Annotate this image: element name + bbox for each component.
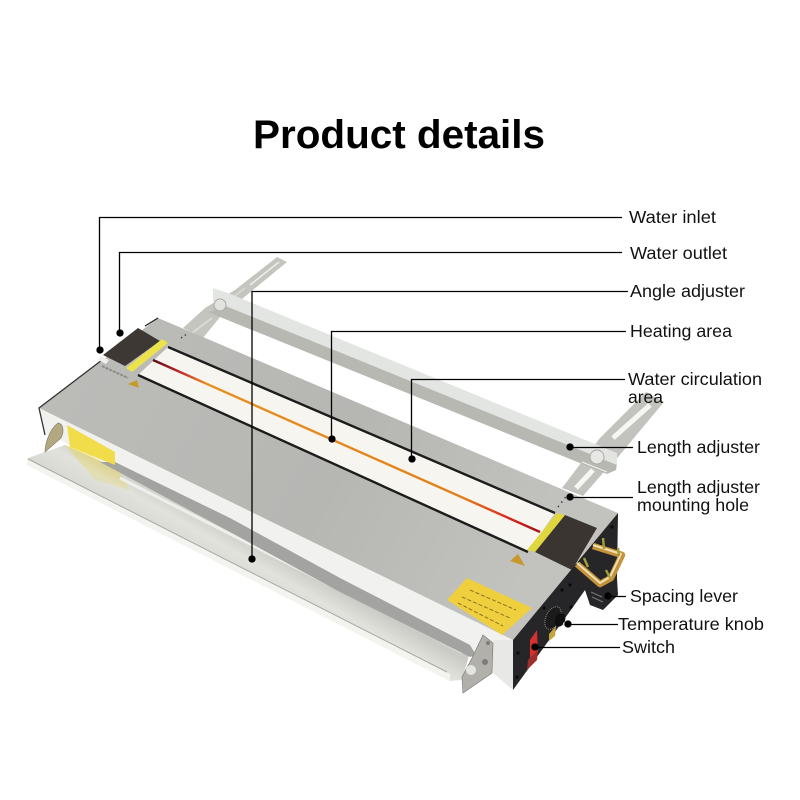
label: heating area: Heating area (630, 321, 732, 341)
spacing lever slots (591, 592, 603, 602)
label: water circulation area: Water circulation (628, 369, 762, 389)
right length adjuster arm (562, 392, 664, 496)
heating wire (153, 360, 540, 532)
label: spacing lever: Spacing lever (630, 586, 738, 606)
leader: length adjuster mounting hole (567, 494, 633, 500)
heating band (138, 347, 555, 552)
warning triangles (128, 380, 525, 566)
leader: temperature knob (565, 621, 618, 627)
yellow sticker on front face (67, 425, 115, 465)
left dark end cap with yellow band (98, 328, 168, 372)
label: temperature knob: Temperature knob (618, 614, 764, 634)
label: length adjuster mounting hole: mounting hole (637, 495, 749, 515)
leader: length adjuster (567, 444, 633, 450)
flap (lower aluminium lip) (27, 445, 470, 681)
yellow sticker on top (447, 578, 532, 635)
label: water outlet: Water outlet (630, 243, 727, 263)
leader: switch (532, 644, 620, 650)
red power switch (527, 630, 538, 670)
label: length adjuster: Length adjuster (637, 437, 760, 457)
label: water circulation area (628, 369, 762, 407)
temperature dial and knob (542, 604, 567, 641)
title: Product details (253, 113, 545, 157)
label: angle adjuster: Angle adjuster (630, 281, 745, 301)
angle adjuster bar (208, 288, 617, 474)
right dark end cap with yellow band (527, 513, 597, 570)
front face (39, 408, 513, 690)
leader: spacing lever (605, 593, 626, 599)
black end plate (513, 513, 618, 690)
label: switch: Switch (622, 637, 675, 657)
leader: water circulation area (409, 380, 625, 462)
left hinge bracket (45, 423, 63, 452)
small printed label marks (102, 333, 568, 507)
right hinge bracket (462, 635, 493, 693)
label: length adjuster mounting hole: Length adjuster (637, 477, 760, 497)
leader: water inlet (97, 218, 622, 353)
label: length adjuster mounting hole (637, 477, 760, 515)
leader: angle adjuster (249, 292, 628, 562)
label: water inlet: Water inlet (629, 207, 716, 227)
left length adjuster arm (183, 257, 287, 338)
leader: water outlet (117, 252, 622, 336)
machine: acrylic bending heater (27, 257, 664, 693)
brass water connectors (577, 538, 622, 584)
leader: heating area (329, 332, 626, 442)
top grey cover (39, 318, 618, 640)
label: water circulation area: area (628, 387, 663, 407)
